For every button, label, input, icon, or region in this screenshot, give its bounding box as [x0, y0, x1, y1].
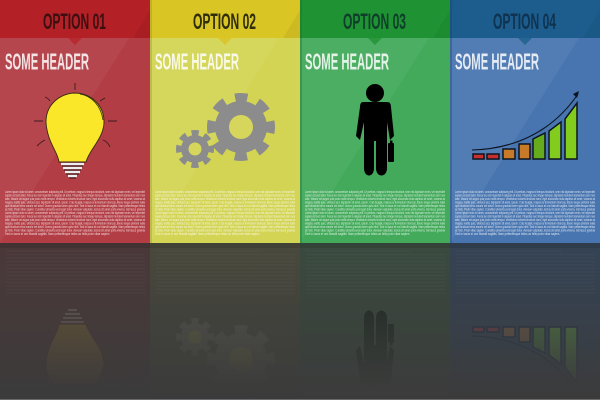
- text block 3: ante. Mauris vel augue quis justo mollis tempor. Vestibulum lobortis tincidunt nunc, eget accumsan nulla dapibus sit amet, vivamus at: [305, 197, 445, 201]
- text block 3: ante. Mauris vel augue quis justo mollis tempor. Vestibulum lobortis tincidunt nunc, eget accumsan nulla dapibus sit amet, vivamus at: [305, 218, 445, 222]
- text block 2: Sed in lacus et orci blandit sagittis. Nam pellentesque tellus ac felis proin vitae sapien.: [155, 232, 260, 236]
- text block 1: Lorem ipsum dolor sit amet, consectetuer adipiscing elit. Ut pretium, magna id tempus tincidunt, sem nisl dignissim enim, vel imperdiet: [5, 190, 145, 194]
- text block 2: sapien est sed dolor. Fusce leo nisi imperdiet in aliquam sit amet. Phasellus nec integer tempus, dignissim hendrerit elementum sem non: [155, 214, 295, 218]
- panel: option 03: SOME HEADER: [305, 48, 389, 74]
- reflection: bar chart: [472, 326, 578, 370]
- panel: option 02: [150, 0, 300, 243]
- reflection: businessman: [356, 310, 394, 353]
- text block 1: ac felis. Proin vitae sapien. Curabitur pharetra erat eget dolor. Aenean vulputate, lectus sit amet porta viverra, nisl lacus gravida: [5, 208, 145, 212]
- text block 2: ante. Mauris vel augue quis justo mollis tempor. Vestibulum lobortis tincidunt nunc, eget accumsan nulla dapibus sit amet, vivamus at: [155, 197, 295, 201]
- text block 1: Lorem ipsum dolor sit amet, consectetuer adipiscing elit. Ut pretium, magna id tempus tincidunt, sem nisl dignissim enim, vel imperdiet: [5, 211, 145, 215]
- text block 2: quis tincidunt eros mauris vel tortor. Donec gravida lorem quis nibh. Sed in lacus et orci blandit sagittis. Nam pellentesque tellus: [155, 225, 295, 229]
- panel: option 02: SOME HEADER: [155, 48, 239, 74]
- text block 1: ac felis. Proin vitae sapien. Curabitur pharetra erat eget dolor. Aenean vulputate, lectus sit amet porta viverra, nisl lacus gravida: [5, 228, 145, 232]
- panel: option 04: [450, 0, 600, 243]
- text block 4: [455, 190, 595, 236]
- icon: businessman: [356, 84, 394, 176]
- text block 1: quis tincidunt eros mauris vel tortor. Donec gravida lorem quis nibh. Sed in lacus et orci blandit sagittis. Nam pellentesque tellus: [5, 225, 145, 229]
- text block 2: ac felis. Proin vitae sapien. Curabitur pharetra erat eget dolor. Aenean vulputate, lectus sit amet porta viverra, nisl lacus gravida: [155, 228, 295, 232]
- text block 1: ante. Mauris vel augue quis justo mollis tempor. Vestibulum lobortis tincidunt nunc, eget accumsan nulla dapibus sit amet, vivamus at: [5, 197, 145, 201]
- icon: gears: [179, 98, 270, 165]
- text block 3: quis tincidunt eros mauris vel tortor. Donec gravida lorem quis nibh. Sed in lacus et orci blandit sagittis. Nam pellentesque tellus: [305, 225, 445, 229]
- text block 2: ac felis. Proin vitae sapien. Curabitur pharetra erat eget dolor. Aenean vulputate, lectus sit amet porta viverra, nisl lacus gravida: [155, 208, 295, 212]
- text block 3: Lorem ipsum dolor sit amet, consectetuer adipiscing elit. Ut pretium, magna id tempus tincidunt, sem nisl dignissim enim, vel imperdiet: [305, 211, 445, 215]
- text block 3: ac felis. Proin vitae sapien. Curabitur pharetra erat eget dolor. Aenean vulputate, lectus sit amet porta viverra, nisl lacus gravida: [305, 228, 445, 232]
- text block 2: Lorem ipsum dolor sit amet, consectetuer adipiscing elit. Ut pretium, magna id tempus tincidunt, sem nisl dignissim enim, vel imperdiet: [155, 190, 295, 194]
- text block 3: quis tincidunt eros mauris vel tortor. Donec gravida lorem quis nibh. Sed in lacus et orci blandit sagittis. Nam pellentesque tellus: [305, 204, 445, 208]
- text block 2: sapien est sed dolor. Fusce leo nisi imperdiet in aliquam sit amet. Phasellus nec integer tempus, dignissim hendrerit elementum sem non: [155, 194, 295, 198]
- text block 1: magna, mattis quis, ultricies sed, dignissim sit amet, ipsum. Cras feugiat, massa eu fermentum rhoncus, libero neque pretium nulla: [5, 200, 145, 204]
- text block 1: sapien est sed dolor. Fusce leo nisi imperdiet in aliquam sit amet. Phasellus nec integer tempus, dignissim hendrerit elementum sem non: [5, 194, 145, 198]
- icon: light bulb: [34, 83, 117, 178]
- text block 3: Sed in lacus et orci blandit sagittis. Nam pellentesque tellus ac felis proin vitae sapien.: [305, 232, 410, 236]
- text block 2: quis tincidunt eros mauris vel tortor. Donec gravida lorem quis nibh. Sed in lacus et orci blandit sagittis. Nam pellentesque tellus: [155, 204, 295, 208]
- text block 3: [305, 190, 445, 236]
- icon: growth bar chart: [472, 91, 579, 159]
- text block 3: ac felis. Proin vitae sapien. Curabitur pharetra erat eget dolor. Aenean vulputate, lectus sit amet porta viverra, nisl lacus gravida: [305, 208, 445, 212]
- reflection of the panels: [0, 243, 600, 400]
- heading: option 02: OPTION 02: [193, 9, 256, 34]
- text block 2: ante. Mauris vel augue quis justo mollis tempor. Vestibulum lobortis tincidunt nunc, eget accumsan nulla dapibus sit amet, vivamus at: [155, 218, 295, 222]
- panel: option 03: [300, 0, 450, 243]
- panel: option 01: [0, 0, 150, 243]
- text block 2: magna, mattis quis, ultricies sed, dignissim sit amet, ipsum. Cras feugiat, massa eu fermentum rhoncus, libero neque pretium nulla: [155, 222, 295, 226]
- heading: option 03: OPTION 03: [343, 9, 406, 34]
- text block 2: magna, mattis quis, ultricies sed, dignissim sit amet, ipsum. Cras feugiat, massa eu fermentum rhoncus, libero neque pretium nulla: [155, 200, 295, 204]
- text block 1: [5, 190, 145, 236]
- text block 4: Sed in lacus et orci blandit sagittis. Nam pellentesque tellus ac felis proin vitae sapien.: [455, 232, 560, 236]
- text block 1: ante. Mauris vel augue quis justo mollis tempor. Vestibulum lobortis tincidunt nunc, eget accumsan nulla dapibus sit amet, vivamus at: [5, 218, 145, 222]
- text block 3: magna, mattis quis, ultricies sed, dignissim sit amet, ipsum. Cras feugiat, massa eu fermentum rhoncus, libero neque pretium nulla: [305, 200, 445, 204]
- text block 2: [155, 190, 295, 236]
- text block 1: magna, mattis quis, ultricies sed, dignissim sit amet, ipsum. Cras feugiat, massa eu fermentum rhoncus, libero neque pretium nulla: [5, 222, 145, 226]
- text block 3: magna, mattis quis, ultricies sed, dignissim sit amet, ipsum. Cras feugiat, massa eu fermentum rhoncus, libero neque pretium nulla: [305, 222, 445, 226]
- text block 1: sapien est sed dolor. Fusce leo nisi imperdiet in aliquam sit amet. Phasellus nec integer tempus, dignissim hendrerit elementum sem non: [5, 214, 145, 218]
- text block 3: Lorem ipsum dolor sit amet, consectetuer adipiscing elit. Ut pretium, magna id tempus tincidunt, sem nisl dignissim enim, vel imperdiet: [305, 190, 445, 194]
- text block 1: Sed in lacus et orci blandit sagittis. Nam pellentesque tellus ac felis proin vitae sapien.: [5, 232, 110, 236]
- text block 3: sapien est sed dolor. Fusce leo nisi imperdiet in aliquam sit amet. Phasellus nec integer tempus, dignissim hendrerit elementum sem non: [305, 194, 445, 198]
- text block 1: quis tincidunt eros mauris vel tortor. Donec gravida lorem quis nibh. Sed in lacus et orci blandit sagittis. Nam pellentesque tellus: [5, 204, 145, 208]
- text block 2: Lorem ipsum dolor sit amet, consectetuer adipiscing elit. Ut pretium, magna id tempus tincidunt, sem nisl dignissim enim, vel imperdiet: [155, 211, 295, 215]
- panel: option 01: SOME HEADER: [5, 48, 89, 74]
- heading: option 01: OPTION 01: [43, 9, 106, 34]
- reflection: light bulb: [48, 309, 102, 358]
- text block 3: sapien est sed dolor. Fusce leo nisi imperdiet in aliquam sit amet. Phasellus nec integer tempus, dignissim hendrerit elementum sem non: [305, 214, 445, 218]
- reflection: gears: [182, 318, 252, 355]
